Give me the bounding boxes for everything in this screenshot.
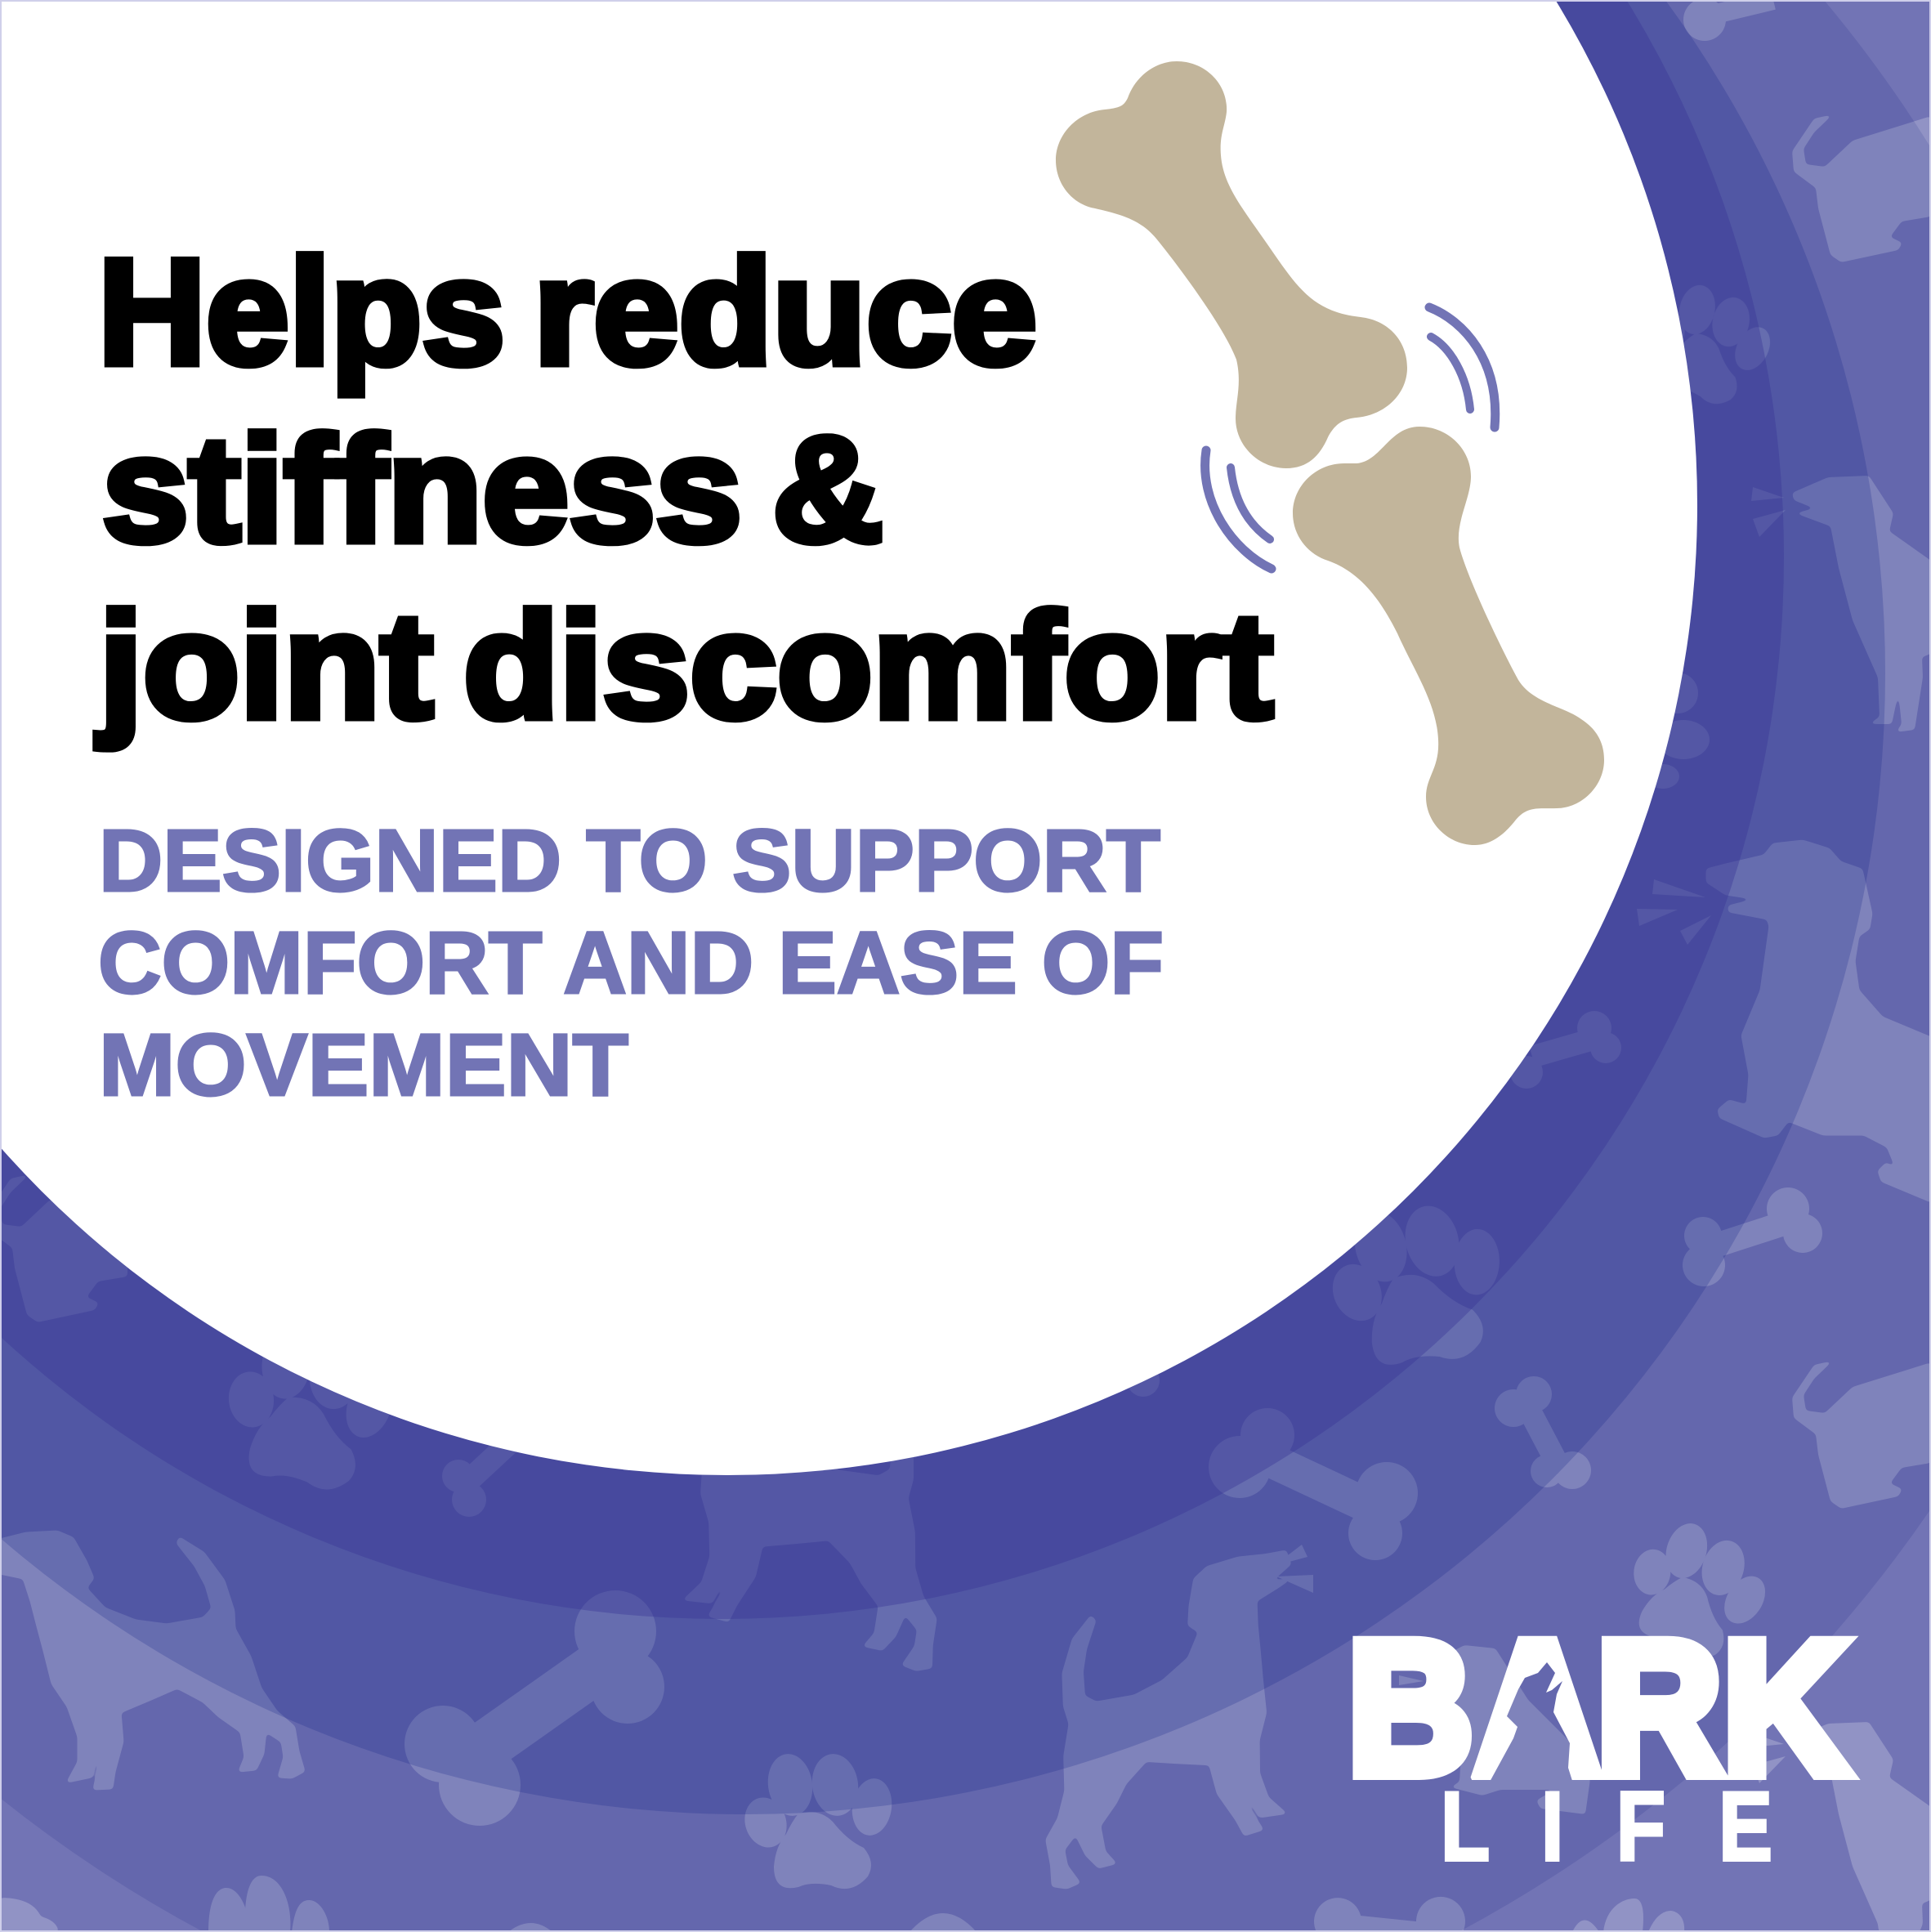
dog rear: middle right [1792, 1361, 1931, 1509]
dog: left standing [0, 1532, 304, 1789]
title [96, 227, 1273, 749]
dog: behind logo [1430, 1645, 1590, 1814]
icon: lower bone [1293, 427, 1604, 845]
dog: behind white circle [592, 1313, 1011, 1686]
icon: two bones forming a joint [1056, 61, 1604, 845]
icon: motion arcs [1205, 307, 1495, 569]
dog: barking up right [968, 1541, 1372, 1903]
title: Helps [98, 227, 505, 396]
paws [207, 270, 1786, 1932]
dog head: bottom left [0, 1898, 59, 1932]
subtitle: COMFORT AND EASE OF [98, 913, 1164, 1012]
dog rear: top right [1792, 114, 1931, 262]
white circle panel [0, 0, 1697, 1475]
title: discomfort [463, 581, 1273, 749]
subtitle: MOVEMENT [99, 1015, 628, 1114]
title: stiffness [102, 405, 742, 573]
title: joint [96, 581, 433, 749]
logo: Bark Life [1352, 1636, 1861, 1862]
dog: lower right [1792, 1722, 1931, 1932]
dog: upper right [1792, 476, 1931, 732]
bones [405, 0, 1822, 1932]
ring: inner band [0, 0, 1784, 1619]
subtitle: DESIGNED TO SUPPORT [99, 811, 1160, 910]
icon: upper bone [1056, 61, 1407, 468]
dog rear: left edge [0, 1174, 127, 1322]
logo wordmark: BARK: BARK [1348, 1603, 1848, 1813]
title: & [772, 405, 883, 573]
subtitle [98, 811, 1164, 1114]
title: reduce [534, 227, 1037, 396]
bark marks [1274, 487, 1786, 1783]
dog: large right [1707, 841, 1931, 1201]
logo wordmark: LIFE: LIFE [1441, 1773, 1772, 1881]
